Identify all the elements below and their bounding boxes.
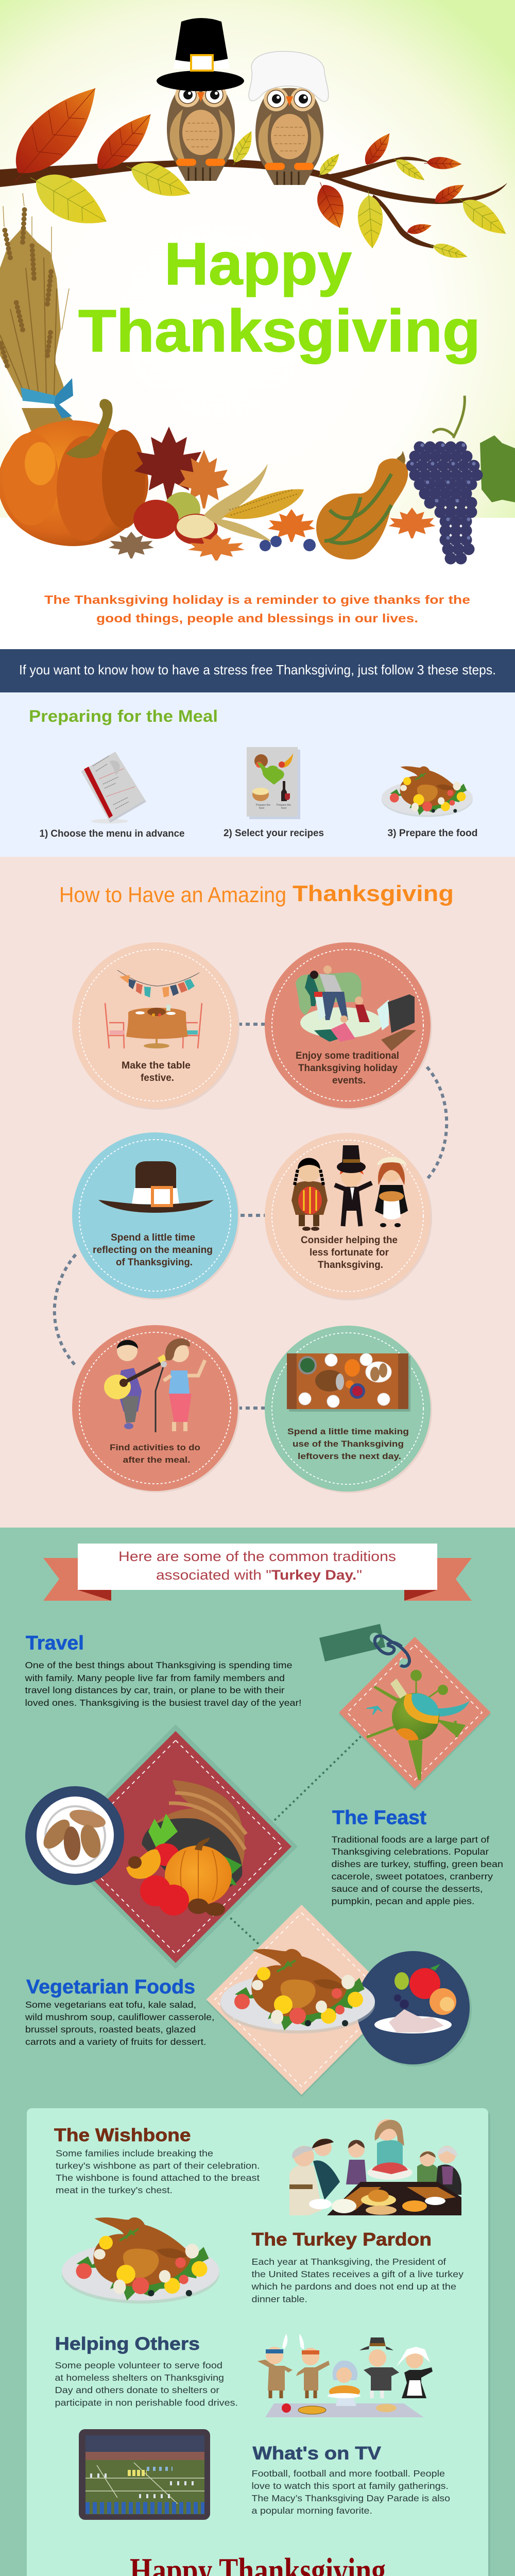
icon: cornucopia	[126, 1780, 246, 1916]
connector dashes	[55, 1024, 447, 1408]
heading: Thanksgiving	[293, 881, 454, 906]
body: Football, football and more football. People	[251, 2468, 445, 2479]
caption: events.	[332, 1075, 366, 1086]
body: Some families include breaking the	[56, 2148, 213, 2158]
caption: Find activities to do	[110, 1443, 200, 1452]
big pumpkin	[0, 399, 148, 546]
panel: preparing for the meal	[0, 692, 515, 857]
body: dishes are turkey, stuffing, green bean	[332, 1859, 503, 1869]
circle: reflect on the meaning	[72, 1132, 239, 1300]
body: wild mushrom soup, cauliflower casserole,	[25, 2012, 215, 2022]
heading: The Wishbone	[54, 2125, 191, 2145]
circle: activities after the meal	[72, 1325, 239, 1493]
circle: make use of leftovers	[265, 1326, 432, 1493]
body	[55, 2360, 238, 2408]
body	[24, 1660, 301, 1708]
body: The Macy’s Thanksgiving Day Parade is also	[251, 2493, 450, 2503]
illustration: pilgrims serving food	[258, 2334, 433, 2417]
body: which he pardons and does not end up at the	[251, 2281, 456, 2292]
body: meat in the turkey's chest.	[56, 2185, 173, 2195]
body: dinner table.	[251, 2294, 307, 2304]
owl with bonnet	[249, 52, 329, 185]
icon: recipe card	[247, 747, 300, 819]
step captions	[39, 828, 478, 839]
body: Each year at Thanksgiving, the President of	[251, 2257, 446, 2267]
caption: Thanksgiving.	[318, 1260, 383, 1270]
wishbone text	[54, 2125, 260, 2195]
intro text	[44, 593, 470, 625]
illustration: three children	[291, 1145, 408, 1231]
title	[78, 230, 480, 364]
icon: fruit plate	[356, 1951, 472, 2066]
what's on tv text	[251, 2444, 450, 2516]
illustration: family at table	[289, 2119, 461, 2215]
body: travel long distances by car, train, or plane to be with their	[25, 1685, 285, 1695]
caption	[296, 1050, 399, 1086]
title: Thanksgiving	[78, 297, 480, 364]
branch	[0, 157, 507, 248]
body: with family. Many people live far from family members and	[24, 1673, 285, 1683]
body	[251, 2468, 450, 2516]
harvest fruits and leaves	[109, 427, 436, 561]
hero panel	[0, 18, 515, 561]
icon: recipe card: Prepare the	[277, 804, 291, 807]
icon: potatoes plate	[25, 1786, 124, 1885]
caption: Make the table	[122, 1060, 191, 1071]
owl with pilgrim hat	[157, 18, 244, 181]
icon: roast turkey	[62, 2217, 219, 2303]
ribbon banner	[43, 1544, 472, 1601]
body: participate in non perishable food drives.	[55, 2398, 238, 2408]
intro text: The Thanksgiving holiday is a reminder to give thanks for the	[44, 593, 470, 606]
vegetarian diamond with turkey	[206, 1905, 472, 2097]
steps banner: If you want to know how to have a stress free Thanksgiving, just follow 3 these steps.	[19, 662, 496, 677]
caption: Thanksgiving holiday	[298, 1063, 398, 1074]
caption: Consider helping the	[301, 1235, 398, 1246]
icon: recipe card: food	[281, 807, 286, 810]
body: cacerole, sweet potatoes, cranberry	[332, 1871, 493, 1882]
icon: recipe card: food	[259, 807, 264, 810]
body: brussel sprouts, roasted beats, glazed	[25, 2024, 196, 2035]
helping others text	[55, 2334, 238, 2408]
step captions: 3) Prepare the food	[387, 828, 478, 839]
heading: The Turkey Pardon	[251, 2230, 432, 2249]
body: One of the best things about Thanksgiving is spending time	[25, 1660, 293, 1670]
panel: how to have an amazing thanksgiving	[0, 857, 515, 1528]
body: Traditional foods are a large part of	[332, 1834, 489, 1844]
body: at homeless shelters on Thanksgiving	[55, 2372, 224, 2383]
gourd	[316, 451, 408, 560]
heading: Helping Others	[55, 2334, 200, 2354]
caption: Spend a little time	[111, 1232, 195, 1243]
body: Day and others donate to shelters or	[55, 2385, 219, 2395]
hero background	[0, 0, 515, 518]
center diamond: cornucopia	[25, 1724, 298, 1969]
body: Thanksgiving celebrations. Popular	[332, 1846, 489, 1857]
caption	[93, 1232, 213, 1268]
illustration: musicians	[104, 1338, 205, 1432]
body: The wishbone is found attached to the breast	[56, 2173, 260, 2183]
body: pumpkin, pecan and apple pies.	[332, 1896, 475, 1906]
body: love to watch this sport at family gatherings.	[251, 2481, 449, 2491]
steps banner	[0, 649, 515, 692]
icon: recipe card: Prepare the	[256, 804, 270, 807]
body	[56, 2148, 260, 2195]
body: Some people volunteer to serve food	[55, 2360, 222, 2370]
body: loved ones. Thanksgiving is the busiest travel day of the year!	[25, 1698, 302, 1708]
step captions: 2) Select your recipes	[224, 828, 324, 839]
caption: less fortunate for	[310, 1247, 389, 1258]
circle: enjoy holiday events	[265, 942, 432, 1110]
body	[251, 2257, 464, 2304]
caption	[287, 1427, 409, 1461]
vegetarian text	[25, 1976, 215, 2047]
wheat sheaf	[0, 193, 76, 431]
body	[25, 1999, 215, 2047]
body: turkey's wishbone as part of their celebration.	[56, 2161, 260, 2171]
caption	[122, 1060, 191, 1083]
circle: make the table festive	[72, 942, 239, 1110]
body: carrots and a variety of fruits for dessert.	[25, 2037, 206, 2047]
caption: Enjoy some traditional	[296, 1050, 399, 1061]
panel: common traditions	[0, 1528, 515, 2576]
title: Happy	[164, 230, 352, 297]
card: traditions	[27, 2108, 490, 2576]
heading: The Feast	[332, 1807, 426, 1829]
icon: pilgrim hat	[98, 1161, 214, 1213]
caption: use of the Thanksgiving	[293, 1439, 404, 1449]
caption: after the meal.	[123, 1455, 191, 1465]
illustration: table from above	[287, 1353, 410, 1412]
body: Some vegetarians eat tofu, kale salad,	[25, 1999, 196, 2010]
body	[332, 1834, 503, 1906]
ribbon banner: associated with " Turkey Day. "	[156, 1567, 362, 1583]
icon: menu	[81, 752, 146, 823]
travel text	[24, 1632, 301, 1708]
turkey pardon text	[251, 2230, 464, 2304]
autumn leaves	[0, 73, 512, 262]
caption	[110, 1443, 200, 1465]
body: a popular morning favorite.	[251, 2505, 372, 2516]
circle: helping the less fortunate	[265, 1133, 432, 1300]
step captions: 1) Choose the menu in advance	[39, 828, 184, 839]
caption: festive.	[141, 1073, 174, 1083]
icon: roast turkey	[220, 1949, 375, 2033]
caption: reflecting on the meaning	[93, 1245, 213, 1256]
heading: What's on TV	[252, 2444, 382, 2464]
icon: roast turkey on plate	[382, 766, 473, 817]
icon: TV football game	[79, 2429, 210, 2520]
body: the United States receives a gift of a live turkey	[251, 2269, 464, 2279]
icon: travel tag with globe	[319, 1624, 491, 1791]
caption: Spend a little time making	[287, 1427, 409, 1436]
heading	[59, 881, 454, 907]
heading: How to Have an Amazing	[59, 883, 286, 907]
heading: Vegetarian Foods	[26, 1976, 195, 1998]
heading: Preparing for the Meal	[29, 707, 218, 725]
caption: leftovers the next day.	[298, 1451, 401, 1461]
dotted connectors	[227, 1736, 361, 1945]
body: sauce and of course the desserts,	[332, 1884, 483, 1894]
ribbon banner: Here are some of the common traditions	[118, 1549, 396, 1564]
caption: of Thanksgiving.	[116, 1257, 193, 1268]
caption	[301, 1235, 398, 1270]
grapes	[412, 396, 515, 558]
feast text	[332, 1807, 503, 1906]
heading: Travel	[26, 1632, 84, 1654]
intro text: good things, people and blessings in our lives.	[96, 612, 418, 625]
